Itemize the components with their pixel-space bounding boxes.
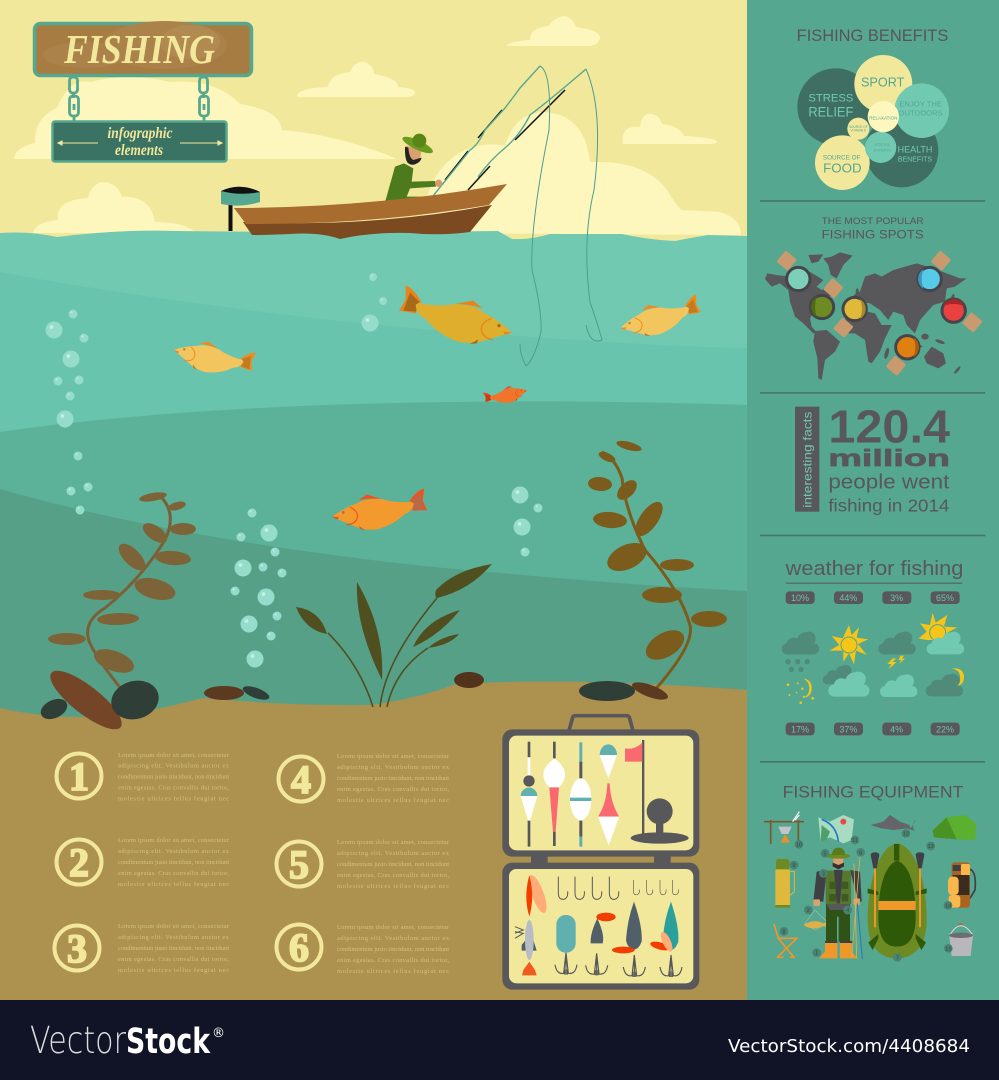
number badges: 3 <box>822 871 825 877</box>
step 6: adipiscing elit. Vestibulum auctor ex <box>337 935 450 942</box>
bubbles <box>46 273 542 668</box>
logo: ® <box>212 1026 225 1041</box>
step 3: adipiscing elit. Vestibulum auctor ex <box>118 934 230 941</box>
floats <box>521 740 689 847</box>
water layers <box>0 231 747 760</box>
step 4 <box>278 753 450 804</box>
world map <box>765 252 967 380</box>
right panel background <box>747 0 999 1000</box>
step 5: Lorem ipsum dolor sit amet, consectetur <box>337 839 450 846</box>
people: people went <box>828 470 950 493</box>
number badges: 6 <box>859 850 862 856</box>
percentage pills top <box>786 591 960 604</box>
icon: fisherman with gear <box>813 848 862 959</box>
million: million <box>828 445 950 471</box>
heading: spots: FISHING SPOTS <box>822 227 924 241</box>
icon: inflatable boat <box>868 843 927 958</box>
fisherman <box>385 134 442 202</box>
hooks <box>558 877 678 899</box>
step 6: molestie ultrices tellus feugiat nec <box>337 968 449 975</box>
bubble diagram: HEALTH <box>898 145 932 155</box>
step 3: 3 <box>67 926 87 971</box>
bubble diagram: SOCIAL <box>874 142 891 147</box>
icon: tent <box>915 815 988 847</box>
number badges: 4 <box>846 908 849 914</box>
fish: orange <box>331 478 430 538</box>
heading: FISHING BENEFITS <box>797 27 948 45</box>
step 6: 6 <box>289 925 309 970</box>
step 1 <box>56 752 230 802</box>
icon: folding chair <box>774 924 797 957</box>
clouds <box>14 16 741 235</box>
step 5: 5 <box>289 842 309 887</box>
heading: spots <box>822 216 924 241</box>
numbered list <box>54 752 450 975</box>
number badges: 7 <box>896 955 899 961</box>
step 6: condimentum justo tincidunt, non tincidunt <box>337 946 449 953</box>
step 2: adipiscing elit. Vestibulum auctor ex <box>118 848 230 855</box>
percentage pills top: 65% <box>936 593 954 603</box>
fish: small red <box>481 374 529 413</box>
number badges: 9 <box>792 863 796 869</box>
boat hull <box>234 184 507 239</box>
step 5: adipiscing elit. Vestibulum auctor ex <box>337 850 450 857</box>
heading: FISHING EQUIPMENT <box>783 783 963 802</box>
lures <box>515 873 682 977</box>
heading: spots: THE MOST POPULAR <box>822 216 924 226</box>
step 1: Lorem ipsum dolor sit amet, consectetur <box>118 752 230 759</box>
step 3 <box>54 923 230 974</box>
step 6 <box>276 924 450 975</box>
heading: weather: weather for fishing <box>785 557 963 580</box>
magnifier markers <box>776 250 983 376</box>
bubble diagram: SOURCE OF <box>823 154 861 161</box>
sign chains <box>70 77 208 121</box>
logo: Vector <box>30 1019 127 1062</box>
plant: left leafy <box>48 491 196 690</box>
icon: map <box>818 815 854 843</box>
percentage pills top: 3% <box>890 593 903 603</box>
stock url: VectorStock.com/4408684 <box>728 1036 970 1057</box>
number badges: 12 <box>903 831 909 837</box>
sign: infographic elements: infographic <box>108 125 172 142</box>
number badges: 5 <box>823 851 827 857</box>
sky background <box>0 0 747 260</box>
bubble diagram: VITAMIN D <box>850 129 867 133</box>
step 4: condimentum justo tincidunt, non tincidunt <box>337 775 449 782</box>
step 1: adipiscing elit. Vestibulum auctor ex <box>118 762 230 770</box>
heading: FISHING <box>63 26 215 72</box>
sign: infographic elements <box>52 122 226 162</box>
step 5: enim egestas. Cras convallis dui tortor, <box>337 872 449 879</box>
number badges: 15 <box>945 946 951 952</box>
icon: fish in net <box>803 910 829 930</box>
weather icons <box>782 613 964 712</box>
icon: swordfish <box>871 815 916 831</box>
step 3: condimentum justo tincidunt, non tincidunt <box>118 945 229 952</box>
bubble diagram: BONDING <box>874 149 891 153</box>
step 4: molestie ultrices tellus feugiat nec <box>337 797 449 804</box>
bubble diagram: OUTDOORS <box>899 109 943 118</box>
plant: right leafy <box>587 439 727 692</box>
icon: backpack <box>948 862 975 908</box>
number badges: 11 <box>852 838 858 844</box>
fish: large yellow <box>399 285 512 344</box>
bubble diagram: SPORT <box>861 76 905 90</box>
sign: infographic elements: elements <box>115 142 163 159</box>
step 1: enim egestas. Cras convallis dui tortor, <box>118 784 229 792</box>
footer band <box>0 1000 999 1080</box>
step 2: molestie ultrices tellus feugiat nec <box>118 881 229 888</box>
step 2: 2 <box>69 840 89 885</box>
boat motor <box>221 187 260 231</box>
step 3: molestie ultrices tellus feugiat nec <box>118 967 229 974</box>
bubble diagram: BENEFITS <box>898 157 932 164</box>
bubble diagram: ENJOY THE <box>899 100 942 109</box>
fish: yellow left <box>170 319 260 392</box>
bubble diagram: STRESS <box>808 93 854 105</box>
step 5: molestie ultrices tellus feugiat nec <box>337 883 449 890</box>
step 5: condimentum justo tincidunt, non tincidunt <box>337 861 449 868</box>
step 6: Lorem ipsum dolor sit amet, consectetur <box>337 924 450 931</box>
number badges: 8 <box>782 929 786 935</box>
panel: popular spots map <box>765 250 983 380</box>
icon: campfire <box>764 812 804 844</box>
step 4: adipiscing elit. Vestibulum auctor ex <box>337 764 450 771</box>
step 2: Lorem ipsum dolor sit amet, consectetur <box>118 837 230 844</box>
logo: Stock <box>126 1022 211 1062</box>
big number: 120.4 <box>828 401 950 453</box>
sign: fishing title <box>34 21 252 76</box>
fishing rods and lines <box>433 66 602 366</box>
bubble diagram: RELIEF <box>808 103 853 119</box>
bubble diagram: RELAXATION <box>869 115 897 120</box>
step 6: enim egestas. Cras convallis dui tortor, <box>337 957 449 964</box>
step 1: condimentum justo tincidunt, non tincidunt <box>118 774 229 780</box>
fish: yellow right <box>620 294 701 336</box>
step 2: enim egestas. Cras convallis dui tortor, <box>118 870 229 877</box>
panel: interesting facts <box>760 401 985 735</box>
number badges: 10 <box>796 842 802 848</box>
icon: thermos <box>775 859 794 908</box>
bubble diagram <box>797 55 949 190</box>
percentage pills top: 44% <box>839 593 857 603</box>
number badges <box>780 829 953 962</box>
percentage pills bottom: 22% <box>936 724 954 734</box>
logo <box>30 1019 225 1062</box>
percentage pills bottom: 4% <box>890 724 903 734</box>
percentage pills top: 10% <box>791 593 809 603</box>
step 4: Lorem ipsum dolor sit amet, consectetur <box>337 753 450 760</box>
rocks <box>38 662 670 738</box>
vertical label: interesting facts <box>801 411 814 508</box>
number badges: 2 <box>807 908 810 914</box>
fishing in 2014: fishing in 2014 <box>828 496 950 516</box>
percentage pills bottom: 37% <box>839 724 857 734</box>
step 3: Lorem ipsum dolor sit amet, consectetur <box>118 923 230 930</box>
number badges: 1 <box>815 951 818 957</box>
tackle box <box>502 716 699 990</box>
plant: seaweed <box>296 564 492 707</box>
step 1: molestie ultrices tellus feugiat nec <box>118 796 229 802</box>
step 4: 4 <box>291 757 311 802</box>
panel: fishing benefits <box>760 27 985 241</box>
bubble diagram: SOURCE OF <box>849 125 868 129</box>
step 5 <box>276 839 450 890</box>
bubble diagram: FOOD <box>823 161 862 176</box>
percentage pills bottom: 17% <box>791 724 809 734</box>
step 3: enim egestas. Cras convallis dui tortor, <box>118 956 229 963</box>
number badges: 13 <box>928 844 934 850</box>
step 1: 1 <box>69 754 89 799</box>
step 2 <box>56 837 230 888</box>
panel: fishing equipment <box>764 783 988 962</box>
percentage pills bottom <box>786 723 960 735</box>
number badges: 14 <box>945 903 951 909</box>
step 4: enim egestas. Cras convallis dui tortor, <box>337 786 449 793</box>
step 2: condimentum justo tincidunt, non tincidunt <box>118 859 229 866</box>
icon: bucket <box>949 923 973 956</box>
seabed sand <box>0 681 747 1000</box>
